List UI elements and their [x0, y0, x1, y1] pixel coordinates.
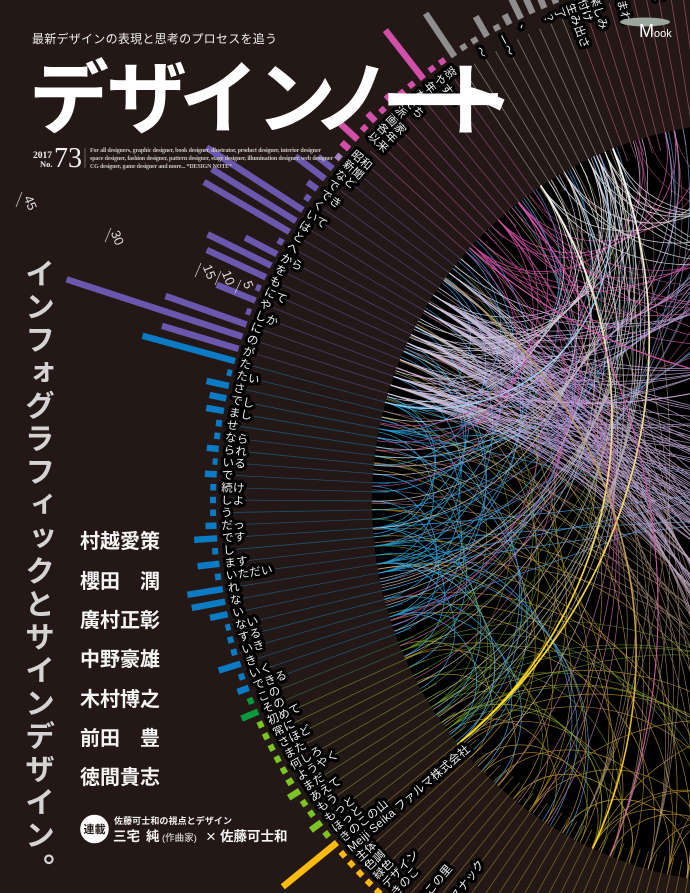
word labels along the ring: う	[221, 506, 233, 520]
word labels along the ring: いただい	[225, 563, 274, 583]
serial names: 三宅	[113, 829, 140, 844]
word labels along the ring: と	[290, 229, 307, 246]
word labels along the ring: 何しろ	[288, 744, 325, 773]
chords: grey and white fans	[229, 24, 690, 766]
word labels along the ring: 年	[421, 79, 439, 97]
word labels along the ring: だっ	[221, 518, 245, 532]
word labels along the ring: に	[249, 321, 264, 337]
word labels along the ring: から	[278, 251, 305, 274]
word labels along the ring: 画家	[383, 111, 409, 138]
word labels along the ring: いき	[240, 638, 266, 657]
word labels along the ring: いる	[222, 457, 246, 471]
word labels along the ring: など	[332, 167, 359, 192]
radial spokes: blue	[233, 366, 411, 682]
masthead title: ザ	[107, 55, 187, 144]
word labels along the ring: できる	[251, 668, 289, 693]
word labels along the ring: でき	[317, 187, 344, 212]
Mook logo: M	[639, 21, 654, 41]
word labels along the ring: でし	[230, 394, 256, 411]
word labels along the ring: 初めて	[265, 701, 303, 728]
axis tick: 30: 30	[108, 228, 127, 247]
black disc	[372, 122, 690, 884]
author names: 木村博之	[80, 688, 160, 711]
chords: pink arcs entering top right	[273, 0, 690, 621]
word labels along the ring: で	[325, 178, 341, 195]
issue number: 73	[54, 143, 82, 174]
word labels along the ring: 新聞	[340, 157, 367, 183]
vertical feature title: インフォグラフィックとサインデザイン。	[20, 258, 53, 886]
bar chart: green bars	[242, 700, 258, 719]
author names: 徳間貴志	[80, 766, 160, 789]
word labels along the ring: まだ	[301, 770, 328, 794]
word labels along the ring: く	[310, 198, 327, 215]
word labels along the ring: ー〜	[494, 32, 516, 59]
serial heading: 佐藤可士和の視点とデザイン	[114, 815, 232, 826]
masthead title: ー	[376, 58, 510, 147]
radial spokes: lime and green	[269, 636, 466, 822]
word labels along the ring: 了	[552, 6, 568, 22]
word labels along the ring: も	[267, 274, 284, 291]
masthead title: ノ	[312, 55, 392, 144]
word labels along the ring: やすい	[431, 72, 462, 108]
word labels along the ring: 色調	[362, 847, 388, 873]
chords: lime and green arcs	[220, 152, 690, 893]
word labels along the ring: へ	[284, 241, 300, 257]
word labels along the ring: せ	[226, 418, 239, 433]
word labels along the ring: きのこの山	[337, 797, 391, 845]
serial names	[113, 827, 288, 846]
word labels along the ring: き	[244, 653, 259, 669]
word labels along the ring: 各年	[374, 120, 401, 146]
issue number: 2017	[33, 151, 52, 161]
word labels along the ring: いく	[248, 662, 274, 681]
word labels along the ring: 昭和	[348, 148, 375, 173]
author names: 中野豪雄	[80, 648, 160, 671]
small descriptor text: For all designers, graphic designer, book designer, illustrator, product designer, interior designer	[90, 148, 321, 154]
bar chart: lime bars	[258, 723, 329, 836]
word labels along the ring: デザイン	[379, 847, 422, 891]
small descriptor text: CG designer, game designer and more... *DESIGN NOTE*	[90, 164, 232, 170]
masthead title: デ	[29, 55, 109, 144]
chords: gold arcs	[217, 208, 690, 893]
word labels along the ring: は	[297, 219, 313, 236]
word labels along the ring: な	[229, 593, 243, 608]
bar chart: magenta bars	[333, 30, 444, 149]
axis tick: 5: 5	[240, 279, 257, 291]
bar chart: blue bars	[142, 336, 249, 692]
chords: purple fans	[254, 0, 690, 893]
word labels along the ring: が	[241, 344, 257, 360]
axis tick: 45: 45	[21, 193, 40, 212]
author names: 櫻田 潤	[80, 570, 160, 593]
chords: bright highlighted arcs	[258, 0, 690, 856]
word labels along the ring: しか	[253, 309, 280, 329]
word labels along the ring: さほど	[276, 723, 314, 750]
divider line	[84, 148, 86, 168]
radial spokes: magenta	[362, 78, 543, 263]
word labels along the ring: 派	[392, 103, 410, 121]
word labels along the ring: 主体	[353, 838, 380, 864]
author names	[80, 530, 160, 789]
axis tick: 15: 15	[200, 262, 219, 281]
word labels along the ring: た	[238, 357, 253, 372]
word labels along the ring: もっと	[322, 794, 358, 825]
word labels along the ring: や	[258, 297, 273, 313]
word labels along the ring: にて	[262, 286, 289, 307]
word labels along the ring: を	[273, 262, 289, 279]
serial badge	[80, 815, 109, 843]
masthead title: ン	[256, 55, 336, 144]
word labels along the ring: たい	[235, 369, 261, 387]
radial spokes: grey	[464, 19, 620, 200]
bar chart: purple bars	[67, 147, 341, 349]
word labels along the ring: また	[282, 739, 309, 762]
word labels along the ring: い	[231, 606, 246, 620]
word labels along the ring: 窓	[441, 65, 459, 82]
word labels along the ring: もう	[314, 791, 341, 815]
serial names: ×	[206, 827, 216, 846]
chords: magenta fans	[218, 0, 690, 824]
masthead title	[29, 55, 515, 147]
small descriptor text	[90, 148, 333, 170]
word labels along the ring: ？	[540, 11, 556, 26]
word labels along the ring: 生み出さ	[563, 1, 593, 50]
word labels along the ring: 〜	[473, 45, 489, 61]
word labels along the ring: 、	[517, 21, 533, 37]
author names: 村越愛策	[80, 530, 160, 553]
Mook logo: ook	[654, 28, 672, 40]
word labels along the ring: し	[223, 544, 236, 558]
author names: 前田 豊	[80, 727, 160, 750]
word labels along the ring: 常に	[271, 717, 298, 739]
radial spokes: gold	[350, 733, 690, 893]
word labels along the ring: 緑色	[371, 856, 396, 882]
word labels along the ring: られ	[223, 444, 248, 459]
word labels along the ring: さ	[232, 381, 247, 396]
issue number	[33, 143, 82, 174]
radial spokes: red	[574, 0, 690, 161]
word labels along the ring: ない	[234, 614, 260, 632]
word labels along the ring: ようやく	[294, 748, 341, 783]
axis tick: 5	[235, 279, 257, 293]
serial names: (作曲家)	[162, 832, 197, 844]
bar chart: yellow bars	[283, 843, 380, 893]
word labels along the ring: 女	[411, 87, 429, 104]
Mook logo	[620, 18, 672, 41]
small descriptor text: space designer, fashion designer, pattern designer, stage designer, illumination designer, web designer	[90, 156, 333, 162]
word labels along the ring: しよ	[221, 494, 245, 507]
word labels along the ring: ほっと	[329, 803, 365, 835]
serial badge: 連載	[84, 822, 106, 836]
word labels along the ring: 続け	[221, 480, 245, 495]
issue number: No.	[40, 159, 53, 169]
word labels along the ring: この	[256, 685, 283, 704]
chords: pale tan arcs on the right	[243, 111, 690, 893]
serial names: 佐藤可士和	[220, 828, 288, 844]
tagline: 最新デザインの表現と思考のプロセスを追う	[32, 31, 277, 46]
serial names: 純	[146, 828, 160, 844]
author names: 廣村正彰	[80, 609, 160, 632]
bar chart: grey bars	[426, 0, 556, 57]
word labels along the ring: です	[222, 530, 246, 545]
word labels along the ring: たち	[402, 95, 427, 121]
word labels along the ring: れ	[227, 580, 241, 595]
word labels along the ring: の	[245, 333, 260, 348]
word labels along the ring: する	[237, 626, 263, 645]
word labels along the ring: 以来	[365, 129, 391, 155]
word labels along the ring: で	[221, 470, 234, 482]
masthead title: イ	[179, 55, 259, 144]
word labels along the ring	[221, 0, 687, 893]
word labels along the ring: ます	[224, 555, 249, 570]
word labels along the ring: その	[260, 695, 287, 716]
masthead title: ト	[435, 57, 515, 146]
word labels along the ring: まし	[228, 406, 253, 423]
chords: blue arcs	[277, 49, 690, 862]
word labels along the ring: Meiji Seika ファルマ株式会社	[344, 742, 473, 854]
radial spokes: purple	[255, 170, 474, 399]
word labels along the ring: あえて	[307, 774, 344, 805]
word labels along the ring: なら	[224, 431, 249, 447]
axis tick: 10: 10	[219, 268, 238, 287]
word labels along the ring: いて	[303, 209, 329, 231]
